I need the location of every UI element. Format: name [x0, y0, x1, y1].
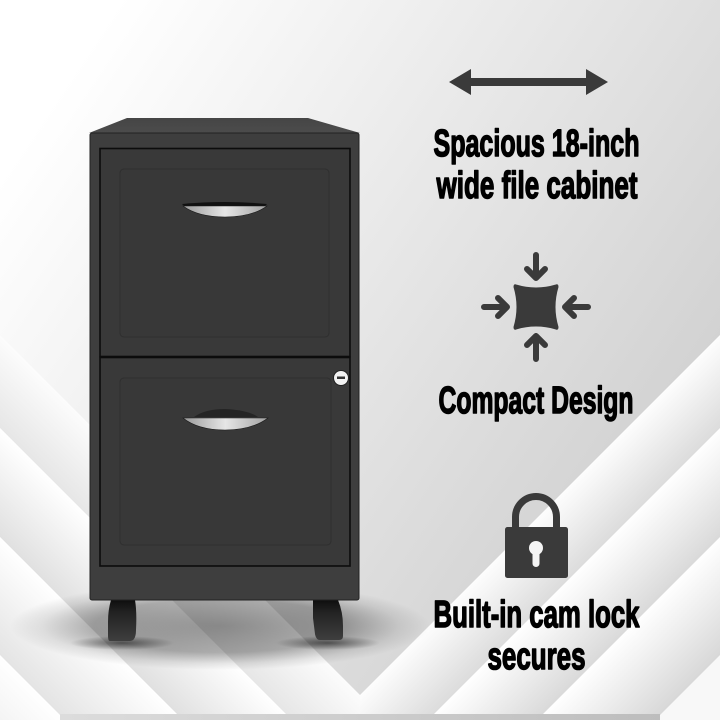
top drawer handle	[182, 202, 267, 217]
floor shadow under cabinet	[10, 582, 430, 670]
feature 3: heading	[434, 594, 640, 678]
feature 1: heading	[434, 123, 640, 207]
top drawer	[100, 148, 350, 356]
cabinet top surface	[89, 118, 360, 133]
bottom drawer	[100, 358, 350, 566]
feature 2: compact icon	[484, 255, 588, 359]
bottom drawer handle	[183, 409, 268, 430]
feature 1: width arrow icon	[449, 69, 608, 95]
file cabinet	[89, 118, 360, 641]
right caster wheel	[313, 600, 343, 640]
cabinet body	[90, 133, 359, 600]
feature 3: padlock icon	[505, 496, 568, 578]
left caster wheel	[108, 600, 136, 641]
cam lock	[334, 370, 348, 386]
feature 3: heading: secures	[488, 636, 586, 678]
